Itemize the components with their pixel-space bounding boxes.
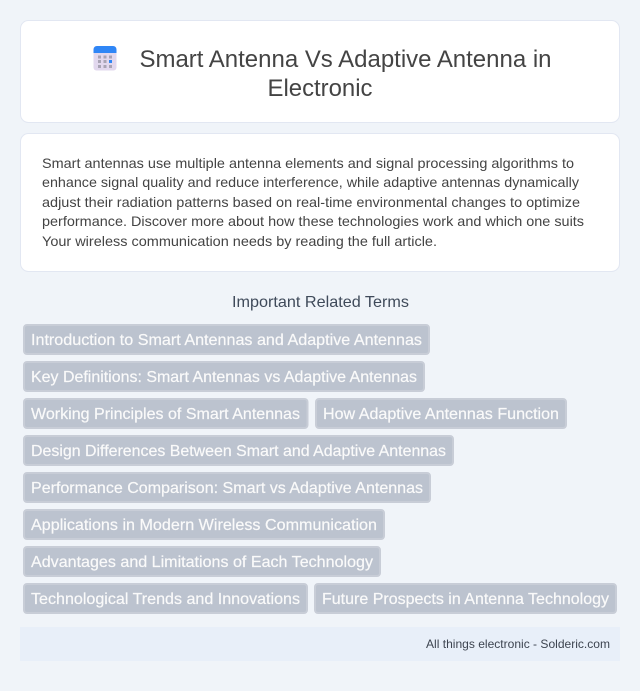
tag: design differences — [24, 436, 453, 465]
footer — [20, 627, 620, 661]
heading: title — [140, 46, 552, 102]
tag: applications: Applications in Modern Wireless Communication — [31, 517, 377, 534]
text block: description — [42, 155, 584, 249]
tag: key definitions: Key Definitions: Smart Antennas vs Adaptive Antennas — [31, 369, 417, 386]
tag: future prospects — [315, 584, 616, 613]
tag: technological trends: Technological Trends and Innovations — [31, 591, 300, 608]
text block: description: enhance signal quality and reduce interference, while adaptive antennas dynamically — [42, 174, 579, 190]
tag: key definitions — [24, 362, 424, 391]
heading: title: Smart Antenna Vs Adaptive Antenna in — [140, 46, 552, 73]
tag: performance comparison: Performance Comparison: Smart vs Adaptive Antennas — [31, 480, 423, 497]
tag: introduction: Introduction to Smart Antennas and Adaptive Antennas — [31, 332, 422, 349]
footer: All things electronic - Solderic.com — [426, 637, 610, 651]
text block: description: performance. Discover more about how these technologies work and which one suits — [42, 213, 584, 229]
tag: how adaptive antennas function — [316, 399, 566, 428]
tag list: related terms — [24, 325, 616, 613]
tag: working principles: Working Principles of Smart Antennas — [31, 406, 300, 423]
heading: important related terms: Important Related Terms — [232, 294, 409, 311]
text block: description: Your wireless communication needs by reading the full article. — [42, 233, 437, 249]
tag: how adaptive antennas function: How Adaptive Antennas Function — [323, 406, 559, 423]
tag: working principles — [24, 399, 308, 428]
tag: introduction — [24, 325, 429, 354]
tag: future prospects: Future Prospects in Antenna Technology — [322, 591, 609, 608]
tag: applications — [24, 510, 384, 539]
tag: advantages and limitations: Advantages and Limitations of Each Technology — [31, 554, 373, 571]
text block: description: Smart antennas use multiple antenna elements and signal processing algorithms to — [42, 155, 574, 171]
tag: technological trends — [24, 584, 307, 613]
panel: description card — [20, 134, 620, 272]
heading: title: Electronic — [268, 75, 372, 102]
tag: design differences: Design Differences Between Smart and Adaptive Antennas — [31, 443, 446, 460]
icon: calendar — [94, 46, 116, 70]
tag: performance comparison — [24, 473, 430, 502]
text block: description: adjust their radiation patterns based on real-time environmental changes to optimize — [42, 194, 580, 210]
panel: title card — [20, 20, 620, 122]
tag: advantages and limitations — [24, 547, 380, 576]
